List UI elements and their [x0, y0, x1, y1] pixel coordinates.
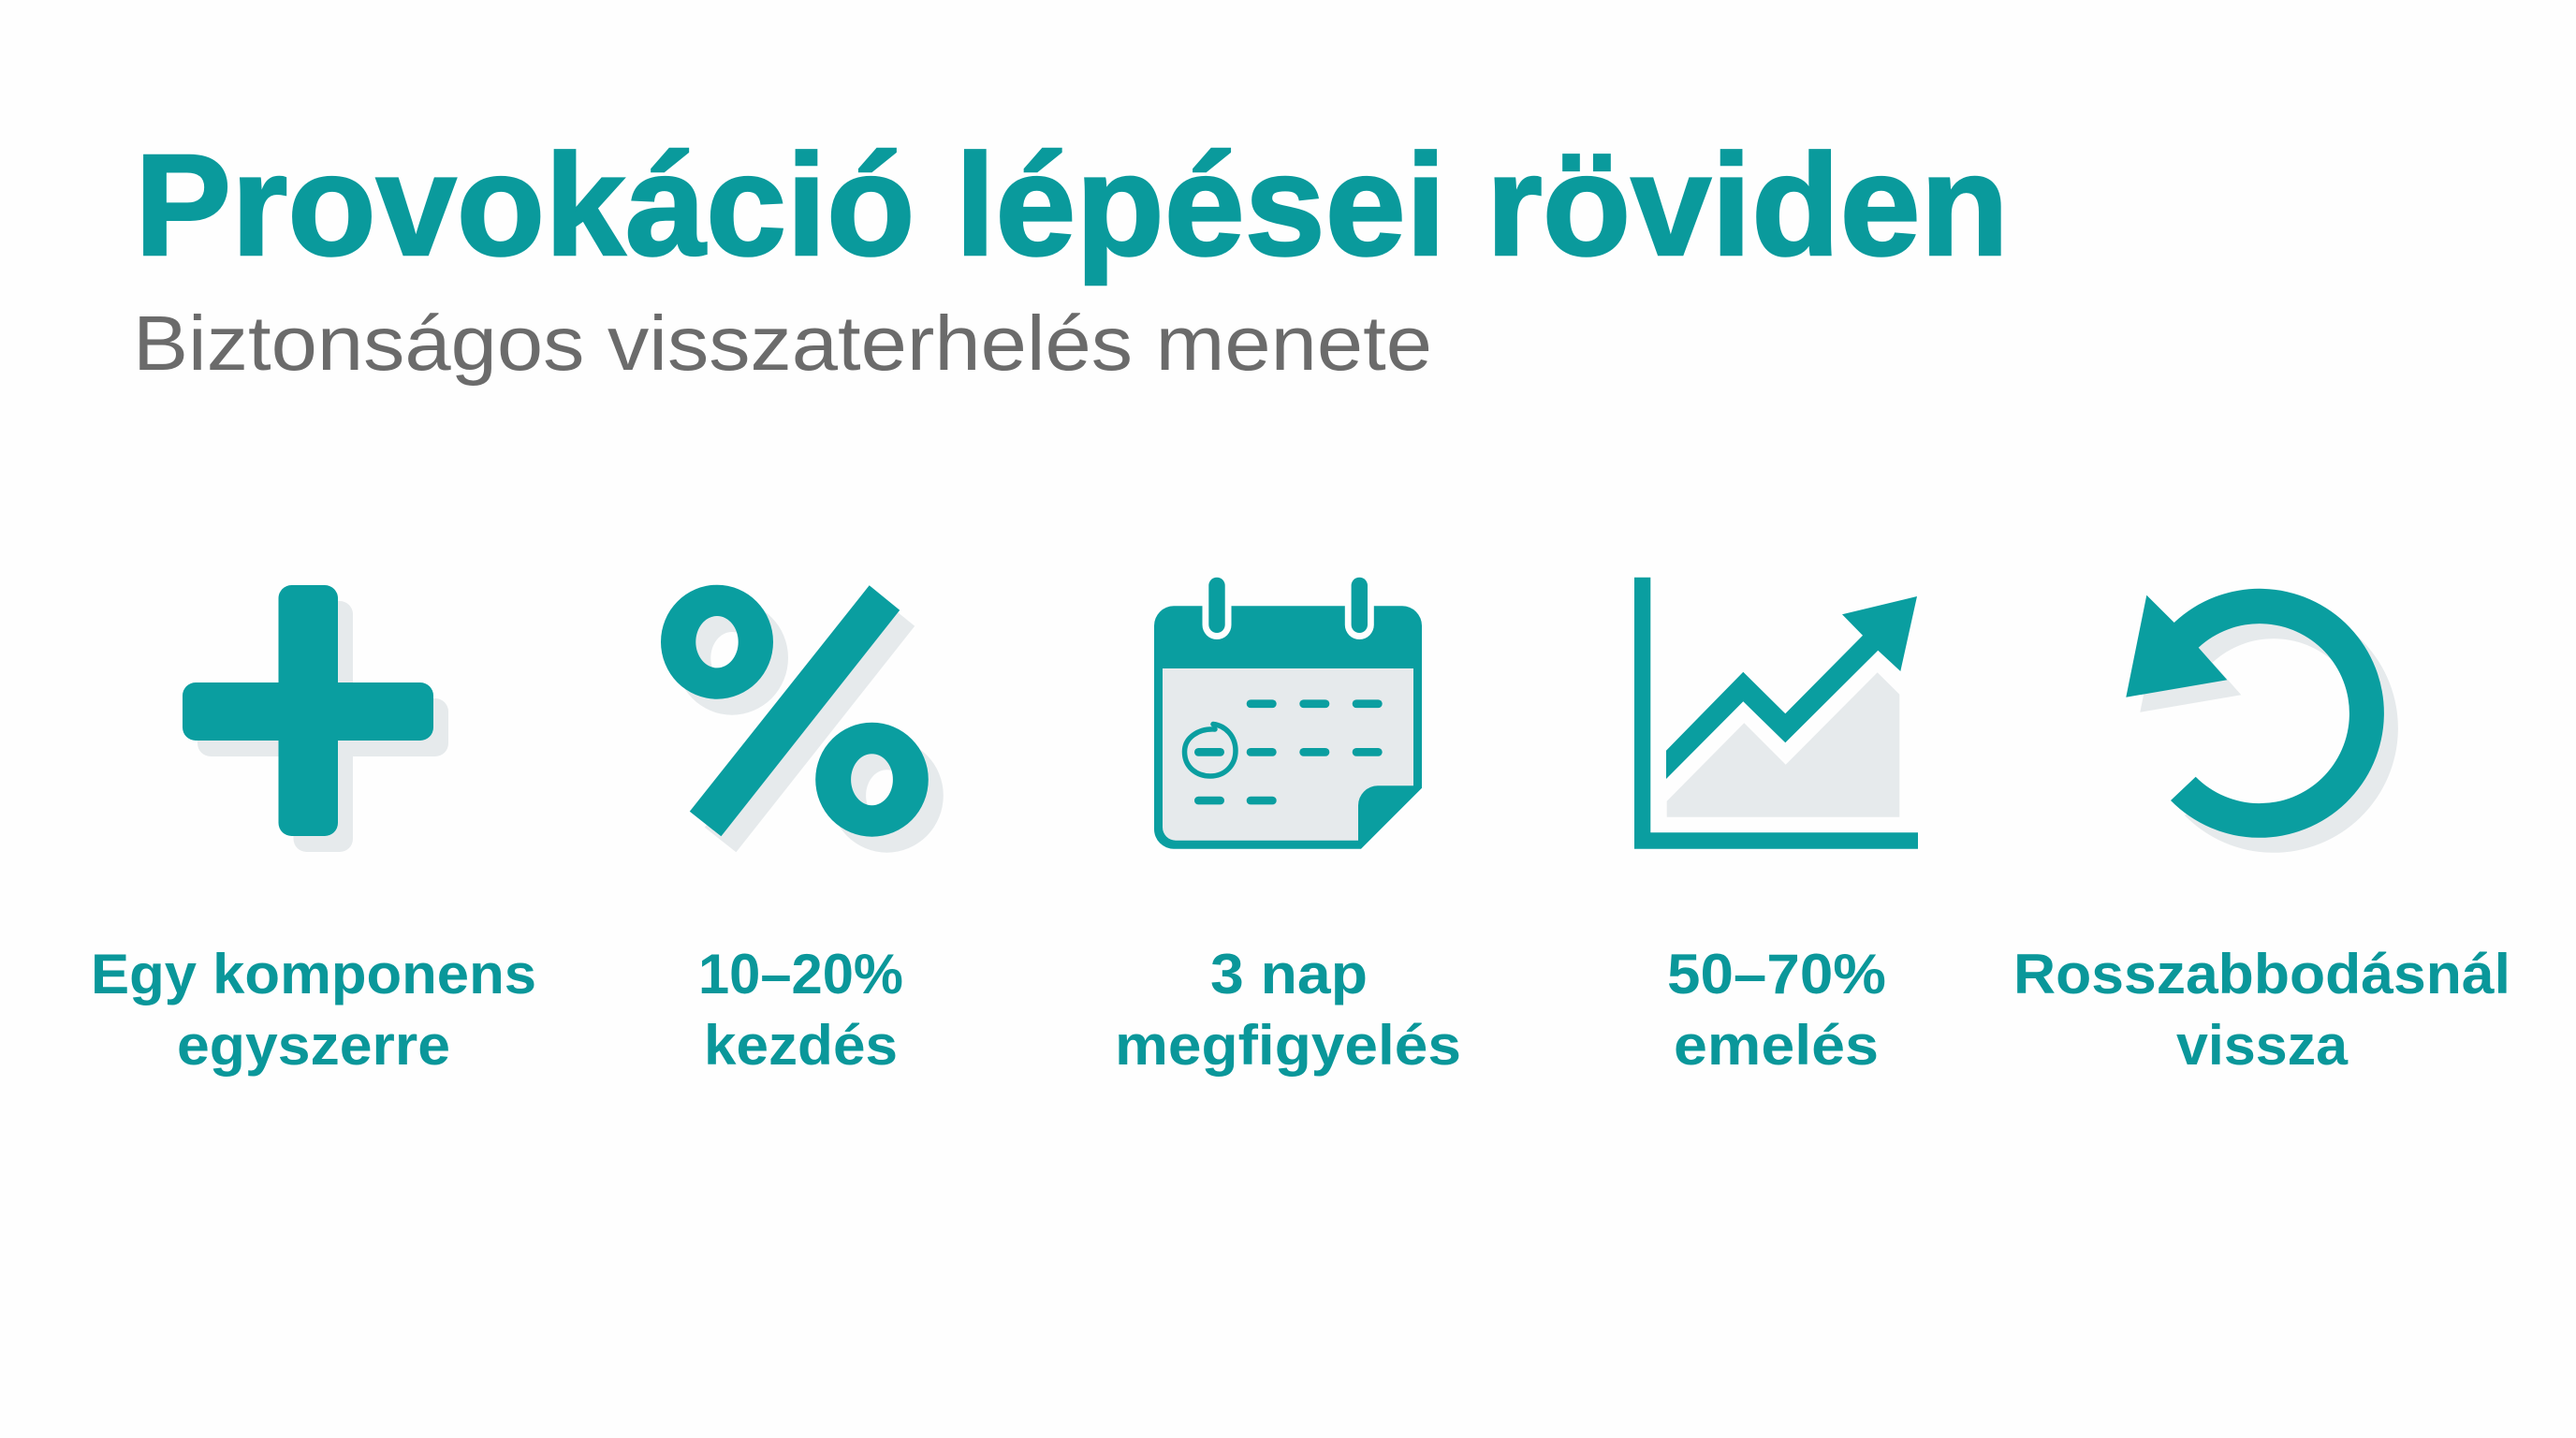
title: Provokáció lépései röviden: [135, 125, 2009, 286]
label: one component: Egy komponens: [91, 943, 536, 1005]
label: start percent: [698, 943, 903, 1077]
label: one component: egyszerre: [177, 1014, 450, 1077]
label: step back: Rosszabbodásnál: [2013, 943, 2510, 1005]
label: observation: 3 nap: [1210, 943, 1368, 1005]
label: start percent: 10–20%: [698, 943, 903, 1005]
label: step back: [2013, 943, 2510, 1077]
icon: calendar: [1154, 562, 1422, 849]
label: increase: 50–70%: [1667, 943, 1886, 1005]
subtitle: Biztonságos visszaterhelés menete: [133, 300, 1432, 387]
icon: rising chart: [1634, 578, 1918, 849]
icon: undo arrow: [2126, 589, 2398, 853]
label: step back: vissza: [2176, 1014, 2349, 1077]
label: observation: [1115, 943, 1461, 1077]
icon: percent: [661, 585, 944, 853]
label: increase: [1667, 943, 1886, 1077]
icon: plus: [183, 585, 448, 852]
label: start percent: kezdés: [704, 1014, 898, 1077]
label: one component: [91, 943, 536, 1077]
label: increase: emelés: [1674, 1014, 1879, 1077]
label: observation: megfigyelés: [1115, 1014, 1461, 1077]
